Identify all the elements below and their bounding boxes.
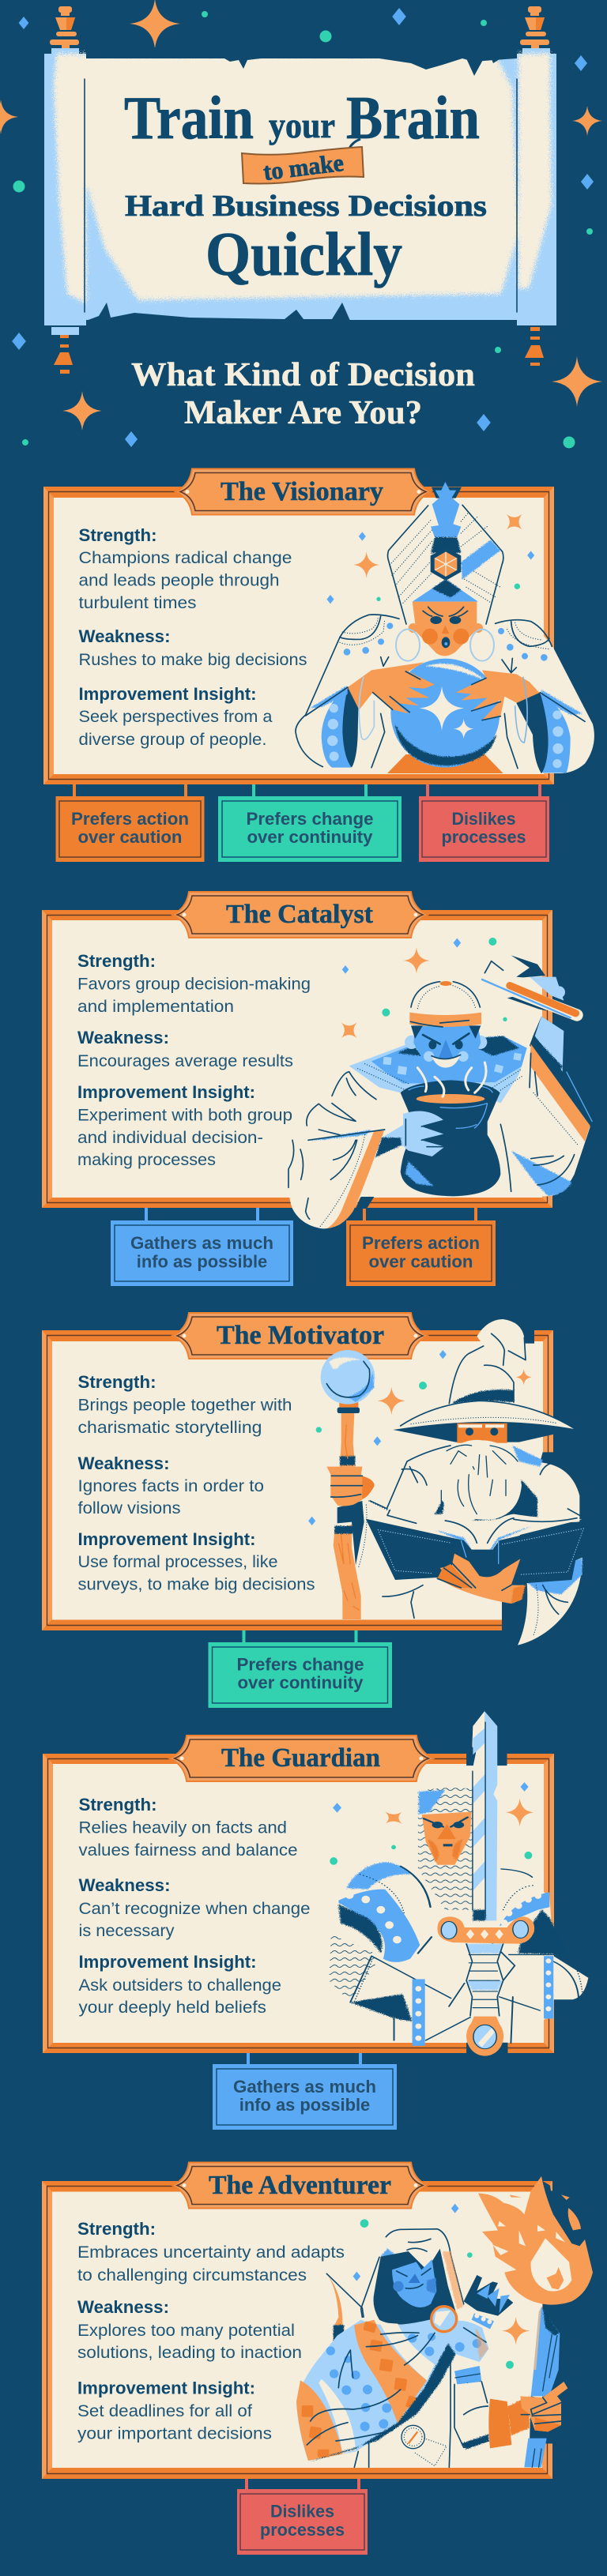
tag: prefers action: over caution [368,1251,473,1272]
tag: prefers change: over continuity [247,827,373,847]
robe and sleeves [288,1017,594,1228]
title plaque [169,1736,433,1781]
text: strength, weakness, insight: Weakness: [77,1453,169,1473]
illustration: wizard with staff and book [308,1319,583,1645]
text: strength, weakness, insight: Encourages average results [77,1052,293,1070]
title: Train [124,84,254,152]
text: strength, weakness, insight: Rushes to make big decisions [79,651,307,669]
text: strength, weakness, insight: Strength: [77,1372,156,1392]
text: strength, weakness, insight: follow visions [77,1499,180,1517]
illustration: adventurer with torch [296,2176,593,2467]
text: strength, weakness, insight: Improvement Insight: [77,2378,255,2398]
title plaque [172,892,428,938]
text: strength, weakness, insight: Experiment with both group [77,1106,292,1125]
text: strength, weakness, insight: Seek perspectives from a [79,708,273,726]
tag: prefers action: Prefers action [71,809,189,829]
title: Quickly [205,220,402,288]
text: strength, weakness, insight: to challenging circumstances [77,2266,307,2285]
text: strength, weakness, insight: Embraces uncertainty and adapts [77,2243,345,2262]
wizard hat [393,1319,575,1443]
panel: The Motivator [42,1313,583,1708]
turban [387,482,503,624]
text: strength, weakness, insight: and implementation [77,998,234,1016]
text: strength, weakness, insight: Strength: [77,2219,156,2239]
cloak [296,2273,488,2462]
torch [524,2307,560,2467]
text: strength, weakness, insight: Weakness: [77,2297,169,2317]
text: strength, weakness, insight: diverse group of people. [79,731,267,749]
illustration: visionary with crystal ball [296,482,594,773]
text: strength, weakness, insight: Favors group decision-making [77,975,311,994]
title plaque: The Guardian [221,1743,380,1773]
text: strength, weakness, insight: values fairness and balance [79,1841,297,1860]
tag: prefers change: over continuity [237,1673,364,1692]
header decorations: stars, diamonds and dots [0,0,602,449]
text: strength, weakness, insight: is necessary [79,1922,175,1940]
cape [349,1036,527,1104]
shoulder plates [338,1862,569,2046]
text: strength, weakness, insight: your important decisions [77,2425,272,2442]
tag: prefers change: Prefers change [247,809,373,829]
panel: The Guardian [43,1711,588,2130]
tag: prefers action [346,1208,496,1286]
panel: The Adventurer [42,2163,593,2555]
face [396,602,494,661]
tag: gathers info: Gathers as much [233,2077,376,2097]
sword [437,1711,534,2056]
frame [42,2181,552,2479]
text: strength, weakness, insight: Explores too many potential [77,2322,295,2340]
title plaque [175,469,431,515]
text: strength, weakness, insight: Improvement Insight: [77,1082,255,1102]
crystal ball [387,659,503,773]
subtitle: What Kind of Decision [131,357,475,393]
tag: dislikes processes [419,784,549,862]
tag: prefers change [218,784,402,862]
title plaque [172,1313,428,1359]
arrows and quiver [464,2275,513,2329]
title plaque: The Adventurer [209,2171,391,2200]
text: strength, weakness, insight: Ask outsiders to challenge [79,1976,281,1995]
frame [43,1754,554,2053]
armor body [329,1866,588,2043]
text: strength, weakness, insight: solutions, leading to inaction [77,2344,302,2362]
robe [358,1446,582,1645]
tag: dislikes processes: processes [260,2520,345,2540]
text: strength, weakness, insight: Strength: [77,951,156,971]
tag: dislikes processes: Dislikes [452,809,515,829]
frame [43,487,554,784]
title: Brain [346,84,480,152]
staff [321,1350,375,1619]
tag: dislikes processes [237,2479,368,2555]
text: strength, weakness, insight: Strength: [79,1795,156,1814]
title plaque [172,2163,428,2209]
title: Hard Business Decisions [125,190,487,223]
text: strength, weakness, insight: Weakness: [79,626,171,646]
text: strength, weakness, insight: Relies heavily on facts and [79,1818,287,1837]
text: strength, weakness, insight: Champions radical change [79,549,292,567]
panel: The Catalyst [42,892,594,1286]
banner: to make [242,147,364,186]
text: strength, weakness, insight [77,2219,345,2442]
frame [42,1330,553,1630]
flame [478,2176,593,2305]
frame [42,910,552,1208]
tag: gathers info: info as possible [239,2095,370,2115]
hood and face [361,2229,464,2325]
tag: prefers action: Prefers action [362,1233,480,1253]
hands and sleeves [306,662,585,773]
tag: prefers change: Prefers change [237,1654,364,1675]
head and hat [405,981,487,1072]
belt [354,2425,447,2467]
text: strength, weakness, insight: Strength: [79,525,156,545]
cauldron [375,1062,500,1196]
text: strength, weakness, insight: Weakness: [79,1875,171,1895]
text: strength, weakness, insight: turbulent times [79,594,196,612]
text: strength, weakness, insight: Improvement Insight: [77,1529,256,1549]
text: strength, weakness, insight [77,951,311,1169]
chainmail coif and face [418,1788,472,1910]
text: strength, weakness, insight: making processes [77,1151,216,1169]
tag: dislikes processes: processes [441,827,526,847]
tag: prefers action: over caution [77,827,182,847]
scroll parchment [86,58,517,320]
title: your [269,105,335,145]
title plaque: The Motivator [217,1321,384,1350]
test tube and raised hand [482,955,577,1017]
text: strength, weakness, insight: charismatic storytelling [77,1419,262,1437]
text: strength, weakness, insight: and individual decision- [77,1129,263,1147]
text: strength, weakness, insight: Brings people together with [77,1397,292,1414]
text: strength, weakness, insight: Improvement Insight: [79,1952,256,1972]
text: strength, weakness, insight: Use formal processes, like [77,1553,278,1571]
tag: prefers action [55,784,204,862]
text: strength, weakness, insight: Ignores facts in order to [77,1477,264,1495]
tag: gathers info: info as possible [137,1251,267,1272]
text: strength, weakness, insight: Can’t recognize when change [79,1900,310,1918]
text: strength, weakness, insight: and leads people through [79,572,280,589]
text: strength, weakness, insight: Improvement Insight: [79,684,256,704]
tag: gathers info [111,1208,293,1286]
scroll rods and finials [50,6,550,374]
banner: to make: to make [262,149,345,186]
text: strength, weakness, insight [79,1795,310,2017]
text: strength, weakness, insight: Weakness: [77,1028,169,1047]
text: strength, weakness, insight [77,1372,315,1594]
illustration: catalyst with cauldron [288,938,594,1228]
title plaque: The Catalyst [226,900,374,929]
scroll [44,6,556,374]
title plaque: The Visionary [221,477,383,506]
text: strength, weakness, insight: surveys, to make big decisions [77,1575,315,1594]
beard [435,1440,537,1521]
title [124,84,487,288]
tag: gathers info: Gathers as much [130,1233,273,1253]
subtitle: Maker Are You? [184,395,422,431]
subtitle [131,357,475,431]
tag: dislikes processes: Dislikes [270,2501,334,2521]
tag: gathers info [213,2053,397,2130]
open book [366,1509,583,1604]
text: strength, weakness, insight: your deeply held beliefs [79,1999,266,2017]
text: strength, weakness, insight: Set deadlines for all of [77,2402,252,2420]
illustration: knight with sword [329,1711,588,2056]
arm, bracer and hand [449,2358,567,2467]
panel: The Visionary [43,469,594,862]
tag: prefers change [209,1630,392,1708]
text: strength, weakness, insight [79,525,307,749]
